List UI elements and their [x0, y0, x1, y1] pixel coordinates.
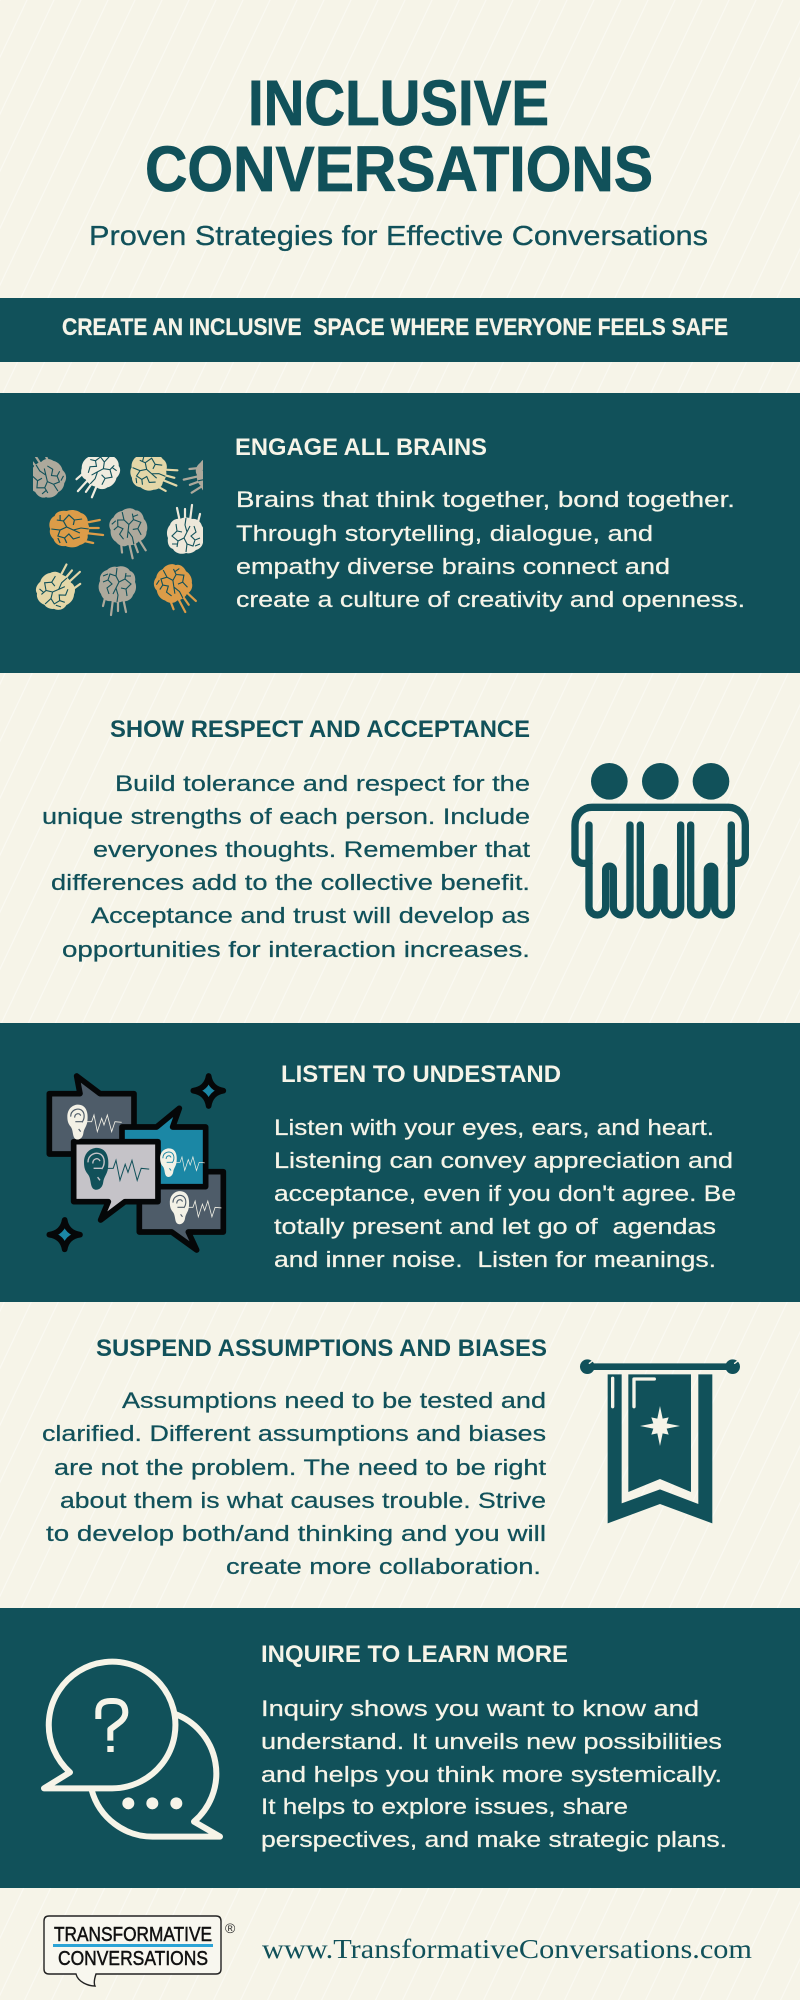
- heading: show respect: SHOW RESPECT AND ACCEPTANCE: [110, 716, 530, 743]
- panel: suspend assumptions and biases: [42, 1335, 740, 1579]
- footer logo: ®: [225, 1920, 236, 1936]
- body text: suspend: to develop both/and thinking and you will: [46, 1521, 546, 1546]
- panel: inquire to learn more: [0, 1608, 800, 1888]
- body text: suspend: clarified. Different assumptions and biases: [42, 1421, 546, 1446]
- body text: show respect: Build tolerance and respect for the: [115, 771, 530, 796]
- body text: engage all brains: Through storytelling, dialogue, and: [236, 521, 653, 546]
- icon: speech bubbles with ears: [49, 1076, 223, 1250]
- body text: engage all brains: empathy diverse brains connect and: [236, 554, 670, 579]
- body text: inquire: Inquiry shows you want to know and: [261, 1696, 699, 1721]
- title: INCLUSIVE: [248, 67, 549, 139]
- heading: inquire: INQUIRE TO LEARN MORE: [261, 1641, 568, 1668]
- body text: show respect: [42, 771, 531, 962]
- body text: show respect: opportunities for interaction increases.: [62, 937, 530, 962]
- heading: suspend: SUSPEND ASSUMPTIONS AND BIASES: [96, 1335, 547, 1362]
- body text: show respect: differences add to the collective benefit.: [51, 870, 530, 895]
- body text: inquire: [261, 1696, 727, 1852]
- body text: show respect: Acceptance and trust will develop as: [91, 903, 530, 928]
- body text: show respect: unique strengths of each person. Include: [42, 804, 530, 829]
- body text: engage all brains: create a culture of creativity and openness.: [236, 587, 745, 612]
- icon: three people: [575, 763, 745, 915]
- body text: listen: totally present and let go of agendas: [274, 1214, 716, 1239]
- footer logo: TRANSFORMATIVE: [54, 1924, 212, 1946]
- banner: [0, 298, 800, 362]
- body text: listen: Listening can convey appreciation and: [274, 1148, 733, 1173]
- title: [145, 67, 653, 205]
- icon: brains: [33, 457, 203, 616]
- body text: suspend: about them is what causes trouble. Strive: [60, 1488, 546, 1513]
- panel: show respect and acceptance: [42, 716, 745, 962]
- icon: question speech bubbles: [44, 1662, 220, 1837]
- title: CONVERSATIONS: [145, 133, 653, 205]
- subtitle: Proven Strategies for Effective Conversations: [89, 220, 708, 251]
- body text: suspend: Assumptions need to be tested and: [122, 1388, 546, 1413]
- footer logo: [44, 1916, 236, 1986]
- body text: inquire: understand. It unveils new possibilities: [261, 1729, 722, 1754]
- heading: engage all brains: ENGAGE ALL BRAINS: [235, 434, 487, 461]
- footer website: www.TransformativeConversations.com: [262, 1934, 752, 1964]
- panel: engage all brains: [0, 393, 800, 673]
- body text: listen: [274, 1115, 736, 1272]
- icon: hanging banner: [580, 1359, 740, 1523]
- body text: suspend: [42, 1388, 547, 1579]
- body text: show respect: everyones thoughts. Remember that: [93, 837, 531, 862]
- body text: engage all brains: Brains that think together, bond together.: [236, 487, 735, 512]
- body text: inquire: and helps you think more systemically.: [261, 1762, 722, 1787]
- footer logo: CONVERSATIONS: [58, 1948, 208, 1970]
- banner: CREATE AN INCLUSIVE SPACE WHERE EVERYONE FEELS SAFE: [62, 314, 728, 341]
- body text: engage all brains: [236, 487, 745, 612]
- body text: suspend: create more collaboration.: [226, 1554, 541, 1579]
- panel: listen to understand: [0, 1023, 800, 1302]
- body text: inquire: perspectives, and make strategic plans.: [261, 1827, 727, 1852]
- body text: inquire: It helps to explore issues, share: [261, 1794, 628, 1819]
- body text: listen: and inner noise. Listen for meanings.: [274, 1247, 716, 1272]
- body text: listen: acceptance, even if you don't agree. Be: [274, 1181, 736, 1206]
- body text: suspend: are not the problem. The need to be right: [54, 1455, 547, 1480]
- body text: listen: Listen with your eyes, ears, and heart.: [274, 1115, 714, 1140]
- heading: listen: LISTEN TO UNDESTAND: [281, 1061, 561, 1088]
